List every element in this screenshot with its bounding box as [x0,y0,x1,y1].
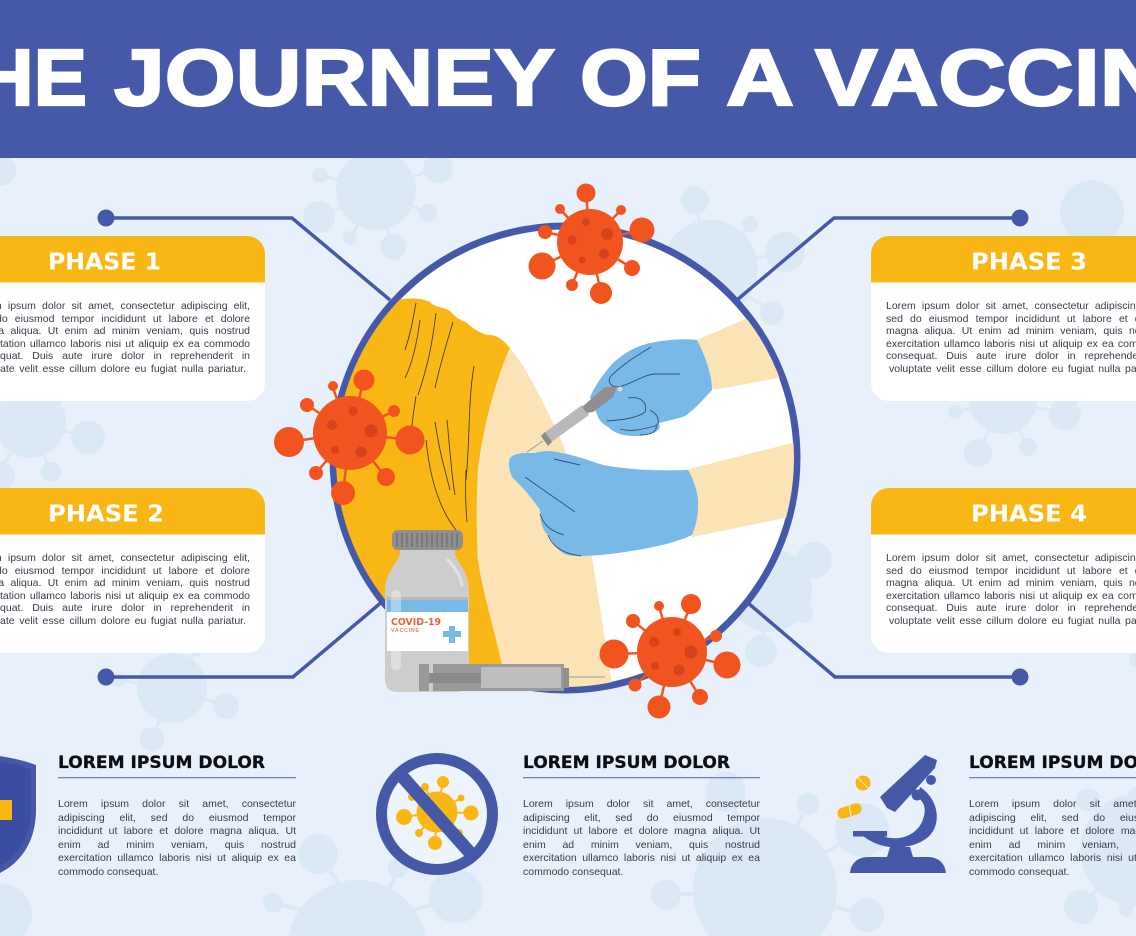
panel: phase 4: PHASE 4 [971,500,1087,528]
connector: phase 3 [737,210,1028,300]
panel: phase 2: PHASE 2 [48,500,164,528]
connector: phase 1 [98,210,390,300]
title banner: OF [580,33,701,122]
vial label: COVID-19 [391,617,441,628]
glove: lower hand [509,451,698,556]
panel: phase 3 [871,236,1136,401]
panel: phase 2 [0,488,265,653]
panel: phase 3: PHASE 3 [971,248,1087,276]
text block: center column: Lorem ipsum dolor sit amet, consectetur [523,798,760,810]
text block: center column: LOREM IPSUM DOLOR [523,753,730,772]
syringe in hand [527,386,622,452]
forearm: upper [697,318,780,390]
central vaccination illustration [320,226,800,700]
upper arm [477,348,613,690]
icon: shield [0,752,36,885]
rolled sleeve [336,298,510,664]
text block: left column: commodo consequat. [58,866,158,878]
text block: left column: enim ad minim veniam, quis nostrud [58,838,296,850]
icon: no virus [382,758,492,870]
text block: left column [58,753,296,880]
panel: phase 4 [871,488,1136,653]
text block: right column [969,753,1136,880]
icon: microscope with pills [836,755,946,873]
title banner: A [726,33,794,122]
text block: left column: Lorem ipsum dolor sit amet, consectetur [58,798,296,810]
glove: upper hand [590,339,712,436]
text block: right column: commodo consequat. [969,866,1069,878]
title banner [0,0,1136,158]
text block: left column: incididunt ut labore et dolore magna aliqua. Ut [58,825,296,837]
syringe on table [419,664,605,691]
panel: phase 1: PHASE 1 [48,248,161,276]
text block: center column [523,753,760,880]
text block: center column: commodo consequat. [523,866,623,878]
panel: phase 1 [0,236,265,401]
text block: center column: adipiscing elit, sed do eiusmod tempor [523,812,760,824]
text block: center column: incididunt ut labore et dolore magna aliqua. Ut [523,825,760,837]
virus: left [274,370,424,505]
connector: phase 2 [98,601,383,686]
text block: left column: adipiscing elit, sed do eiusmod tempor [58,812,296,824]
connector: phase 4 [748,603,1028,686]
vaccine vial: VACCINE [391,628,419,634]
virus: top [528,184,654,304]
title banner: JOURNEY [114,33,555,122]
text block: left column: LOREM IPSUM DOLOR [58,753,265,772]
forearm: lower [685,440,800,537]
text block: center column: enim ad minim veniam, quis nostrud [523,838,760,850]
text block: left column: exercitation ullamco laboris nisi ut aliquip ex ea [58,852,296,864]
virus: bottom [600,594,740,718]
text block: center column: exercitation ullamco laboris nisi ut aliquip ex ea [523,852,760,864]
vaccine vial [385,530,469,692]
